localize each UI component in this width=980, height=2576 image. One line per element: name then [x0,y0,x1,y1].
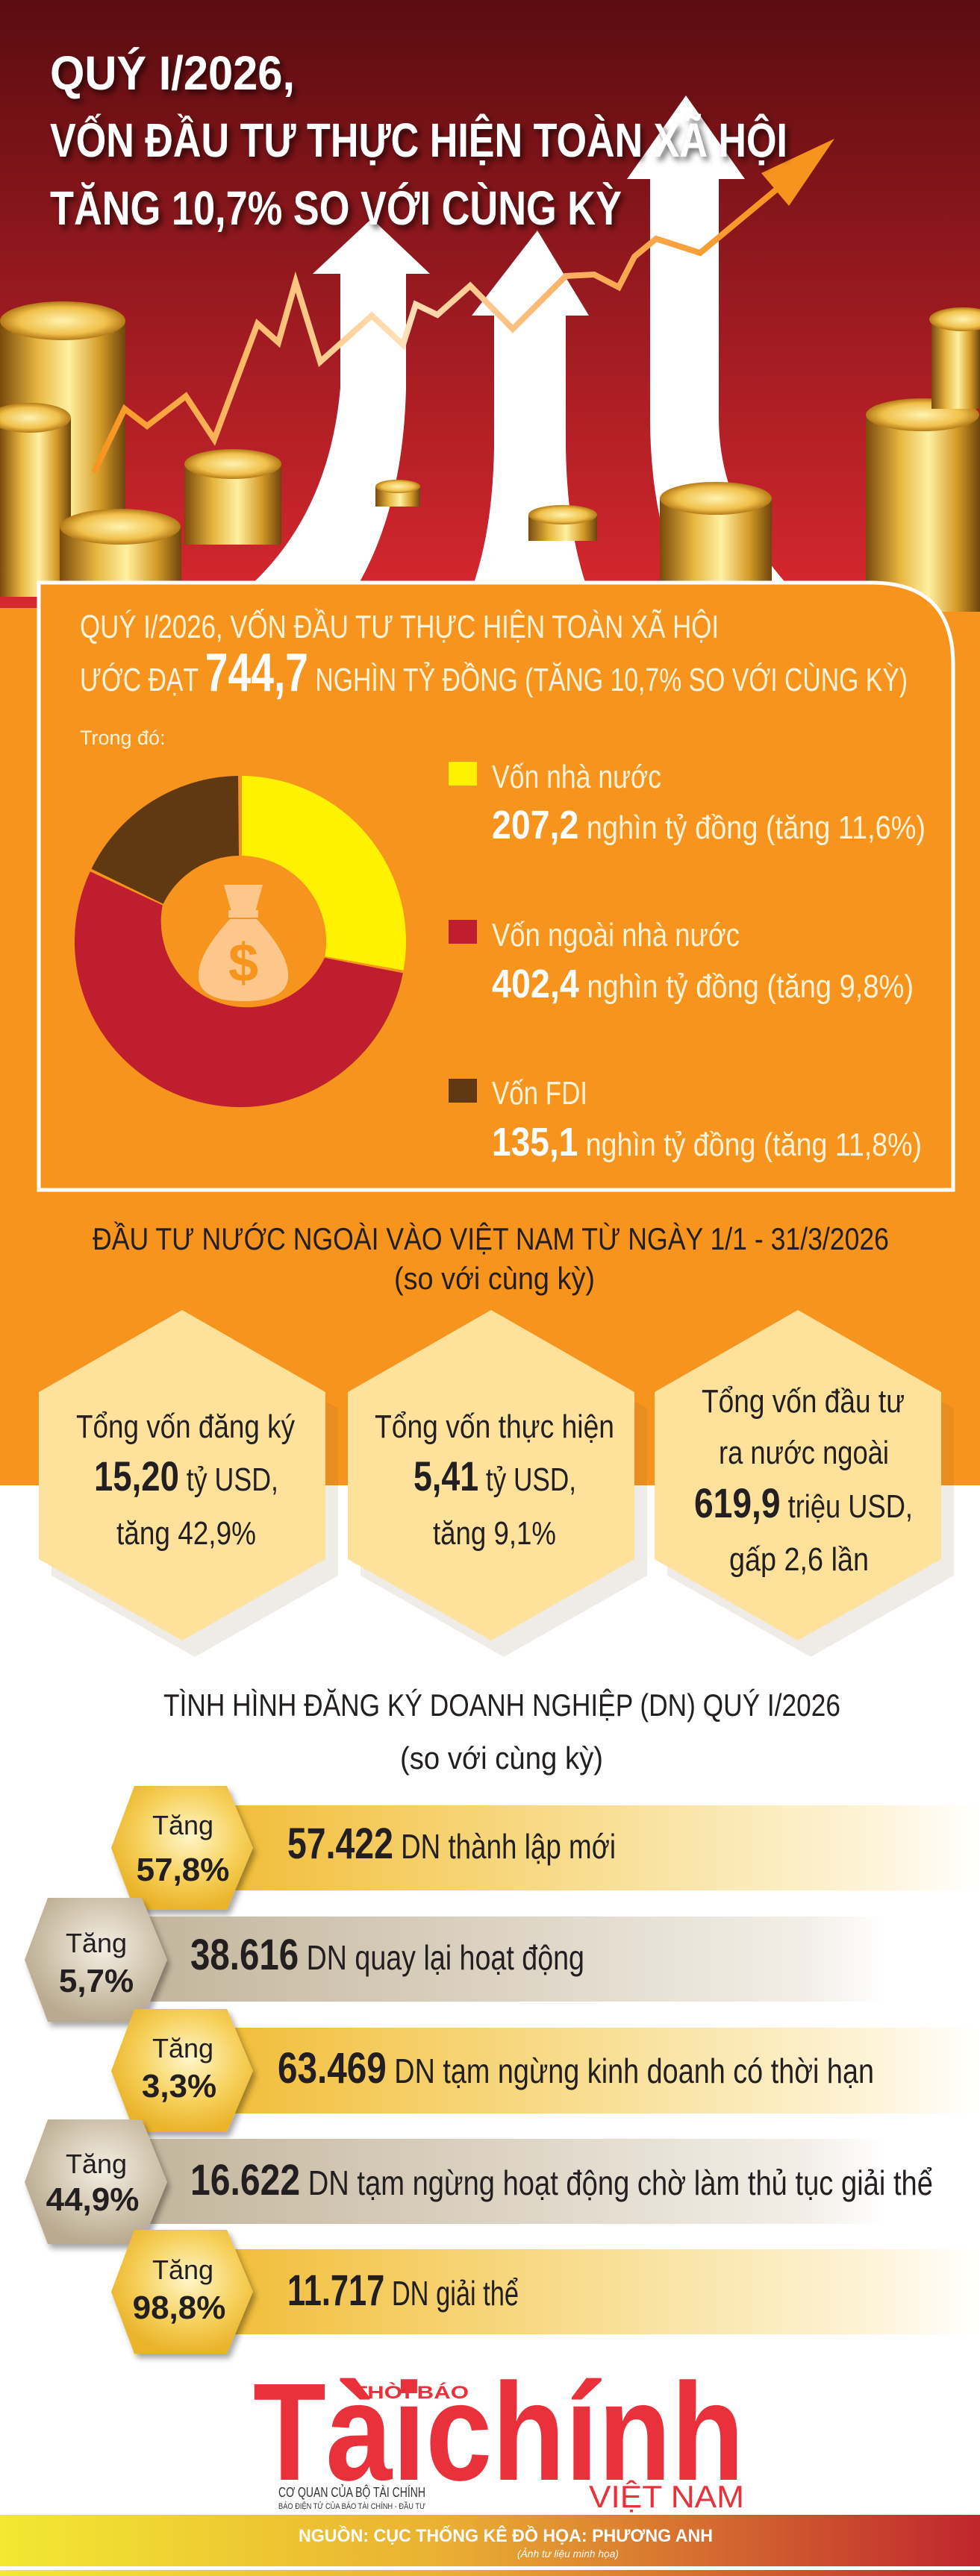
heading: business registration: TÌNH HÌNH ĐĂNG KÝ DOANH NGHIỆP (DN) QUÝ I/2026 [163,1687,840,1723]
legend: von nha nuoc [449,759,926,847]
heading: business registration: (so với cùng kỳ) [400,1740,603,1776]
row: tam ngung kinh doanh: 3,3% [142,2068,216,2105]
footer: source [0,2515,980,2576]
hexagon: dau tu ra nuoc ngoai: ra nước ngoài [719,1435,889,1471]
title: TĂNG 10,7% SO VỚI CÙNG KỲ [50,181,622,235]
row: quay lai hoat dong [25,1898,884,2022]
legend: von FDI: Vốn FDI [492,1075,587,1112]
row: thanh lap moi: 57.422 DN thành lập mới [287,1820,616,1868]
hexagon: tong von dang ky: Tổng vốn đăng ký [76,1408,295,1445]
logo: CƠ QUAN CỦA BỘ TÀI CHÍNH [278,2484,425,2500]
hexagon: dau tu ra nuoc ngoai: 619,9 triệu USD, [694,1479,913,1526]
legend: von FDI [449,1075,922,1165]
hero arrows [237,95,799,597]
hero trend line [94,139,834,472]
logo: THỜI BÁO [353,2382,469,2403]
orange background [0,608,980,1485]
row: thanh lap moi: Tăng [152,1810,213,1840]
legend: von ngoai nha nuoc [449,917,914,1006]
legend: von nha nuoc: Vốn nhà nước [492,759,661,795]
footer: source: NGUỒN: CỤC THỐNG KÊ ĐỒ HỌA: PHƯƠNG ANH [299,2525,713,2546]
row: quay lai hoat dong: 5,7% [59,1963,134,1999]
logo: VIỆT NAM [589,2479,744,2514]
hexagon: dau tu ra nuoc ngoai: gấp 2,6 lần [729,1541,869,1578]
row: tam ngung kinh doanh: Tăng [152,2033,213,2063]
row: thanh lap moi [111,1786,980,1910]
row: quay lai hoat dong: Tăng [66,1928,127,1958]
hexagon: tong von thuc hien: 5,41 tỷ USD, [413,1452,576,1499]
row: tam ngung kinh doanh [111,2009,980,2132]
row: cho giai the [25,2119,933,2244]
title [50,46,787,235]
row: giai the [111,2230,980,2354]
row: thanh lap moi: 57,8% [137,1852,229,1888]
logo: BÁO ĐIỆN TỬ CỦA BÁO TÀI CHÍNH - ĐẦU TƯ [278,2501,425,2511]
hexagon: tong von dang ky: tăng 42,9% [116,1515,256,1552]
hero coin stacks [0,301,980,612]
panel heading: QUÝ I/2026, VỐN ĐẦU TƯ THỰC HIỆN TOÀN XÃ HỘI [80,607,719,645]
logo: Tàichính [253,2355,744,2510]
hexagon: dau tu ra nuoc ngoai [655,1310,954,1657]
hexagon: tong von dang ky [39,1310,338,1657]
row: tam ngung kinh doanh: 63.469 DN tạm ngừng kinh doanh có thời hạn [278,2044,874,2093]
hexagon: tong von thuc hien: Tổng vốn thực hiện [375,1408,614,1445]
row: cho giai the: Tăng [66,2149,127,2179]
heading: FDI: (so với cùng kỳ) [394,1261,595,1296]
icon: money bag [199,885,288,1001]
panel: total investment [39,583,953,1190]
hexagon: tong von dang ky: 15,20 tỷ USD, [94,1452,278,1499]
heading: business registration [163,1687,840,1776]
legend: von FDI: 135,1 nghìn tỷ đồng (tăng 11,8%) [492,1120,922,1165]
hexagon: dau tu ra nuoc ngoai: Tổng vốn đầu tư [702,1383,905,1420]
icon: money bag: $ [228,933,258,993]
legend: von nha nuoc: 207,2 nghìn tỷ đồng (tăng 11,6%) [492,803,926,847]
row: quay lai hoat dong: 38.616 DN quay lại hoạt động [190,1931,584,1979]
legend: von ngoai nha nuoc: 402,4 nghìn tỷ đồng (tăng 9,8%) [492,962,914,1006]
row: giai the: Tăng [152,2254,213,2285]
footer: source: (Ảnh tư liệu minh họa) [517,2547,619,2560]
title: VỐN ĐẦU TƯ THỰC HIỆN TOÀN XÃ HỘI [50,113,787,167]
heading: FDI [93,1221,889,1296]
row: giai the: 98,8% [133,2290,225,2326]
donut chart [75,776,406,1107]
row: cho giai the: 44,9% [46,2181,139,2218]
title: QUÝ I/2026, [50,46,295,100]
legend: von ngoai nha nuoc: Vốn ngoài nhà nước [492,917,740,953]
row: giai the: 11.717 DN giải thể [287,2266,519,2315]
hero background [0,0,980,612]
label: trong do: Trong đó: [80,727,166,749]
hexagon: tong von thuc hien: tăng 9,1% [433,1515,556,1552]
hexagon: tong von thuc hien [348,1310,647,1657]
panel heading [80,607,908,703]
